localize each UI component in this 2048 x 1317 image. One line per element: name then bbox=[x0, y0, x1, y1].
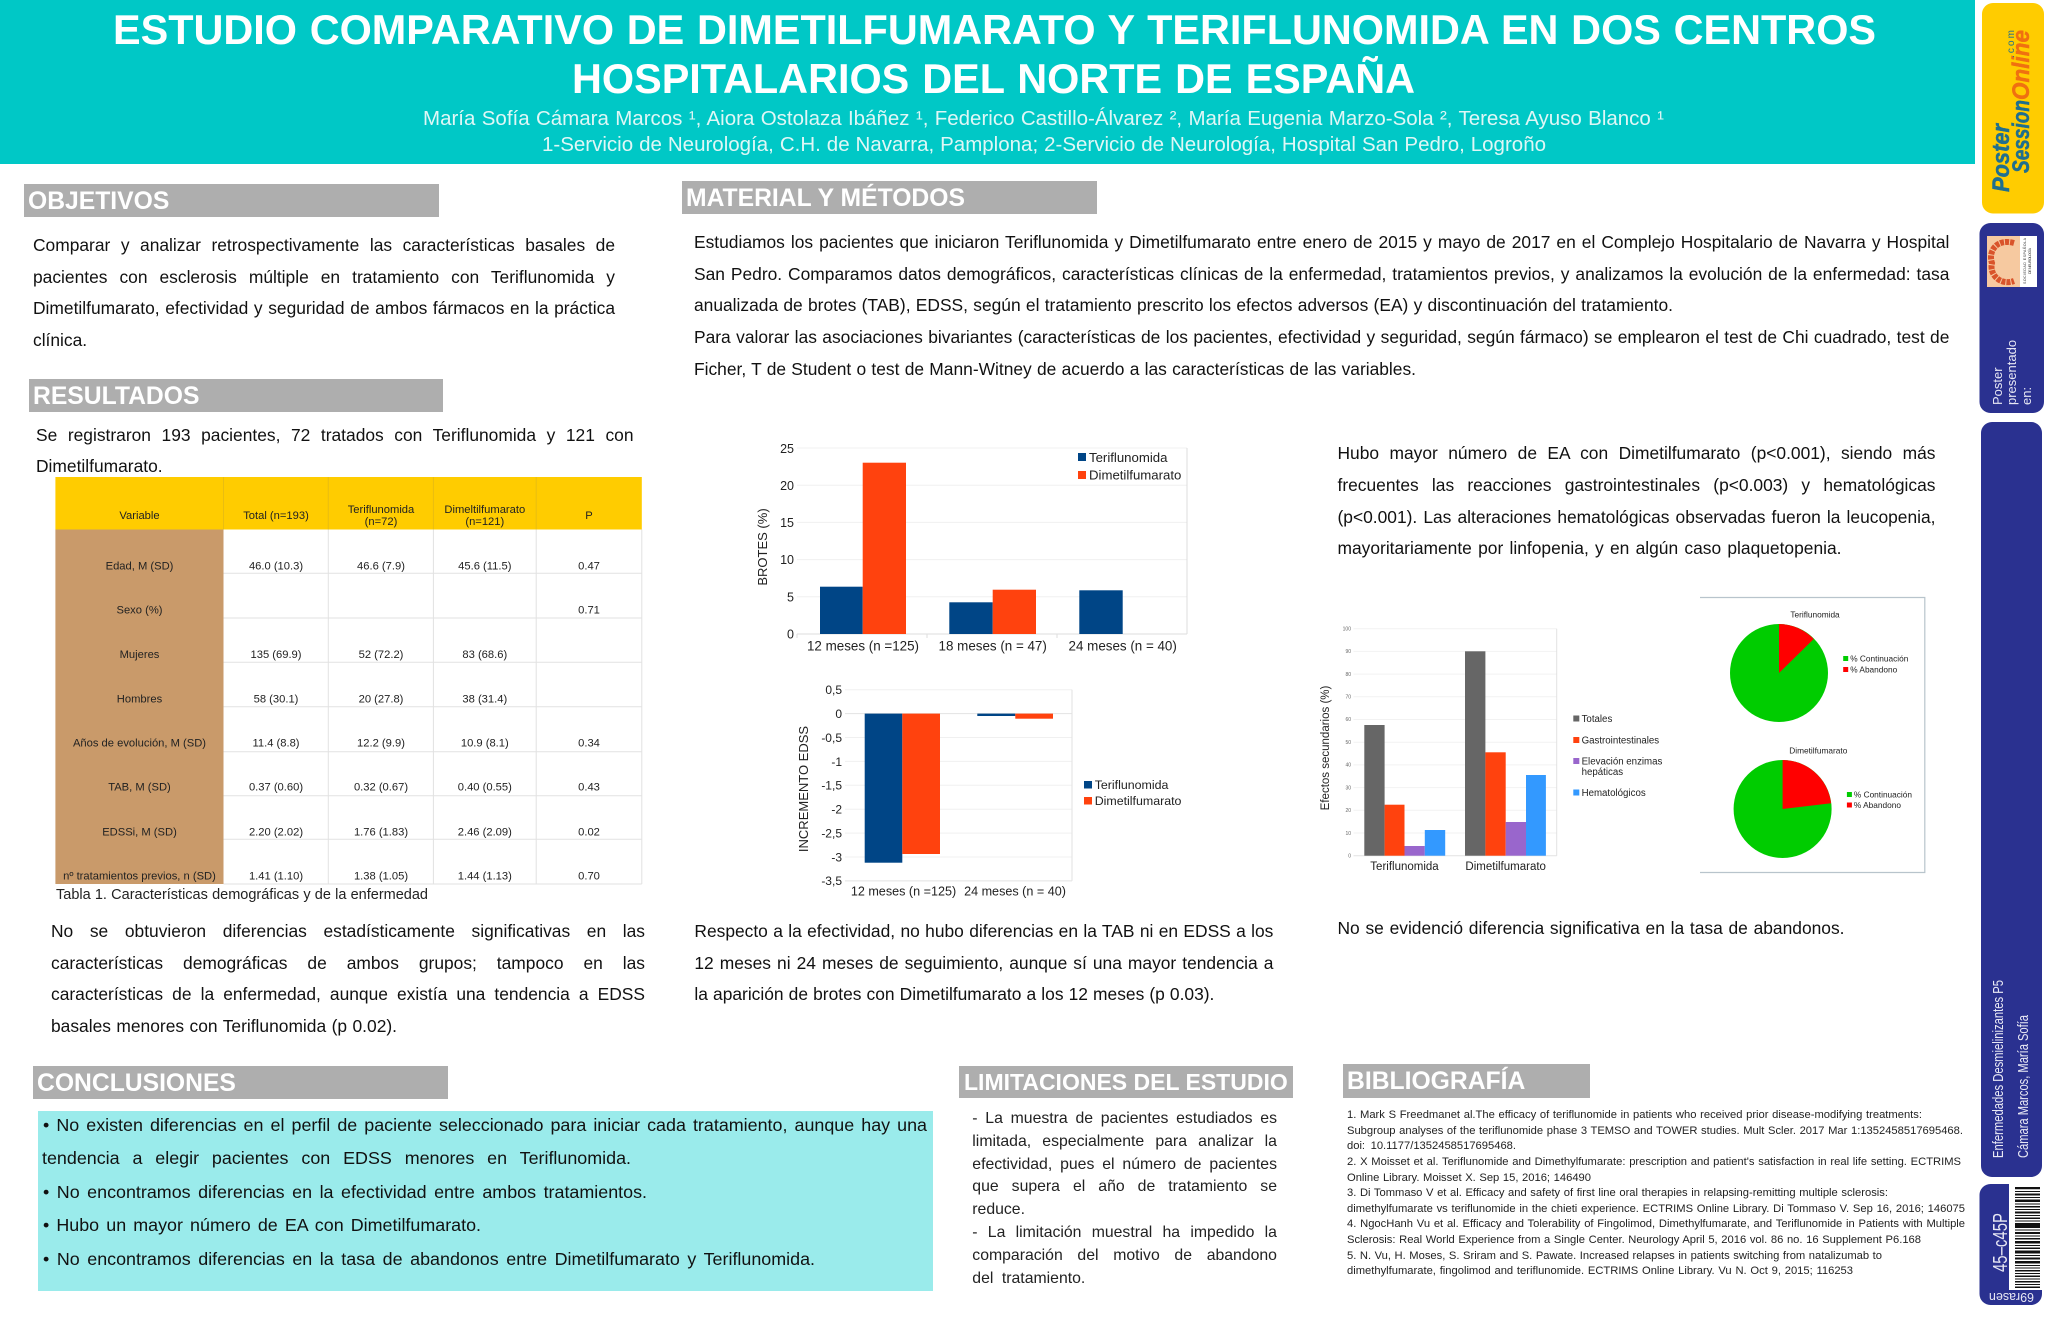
pie chart: dimetilfumarato: % Continuación bbox=[1854, 790, 1912, 800]
heading: limitaciones del estudio: LIMITACIONES DEL ESTUDIO bbox=[964, 1069, 1288, 1095]
text: objetivos: pacientes con esclerosis múltiple en tratamiento con Teriflunomida y bbox=[33, 267, 615, 287]
text: bibliografia: 3. Di Tommaso V et al. Efficacy and safety of first line oral therapies in relapsing-remitting multiple sclerosis: bbox=[1347, 1187, 1888, 1199]
bar chart: incremento EDSS: Teriflunomida bbox=[1095, 778, 1168, 792]
heading: bibliografia: BIBLIOGRAFÍA bbox=[1347, 1068, 1525, 1095]
bar chart: brotes: 12 meses (n =125) bbox=[807, 638, 919, 654]
table: baseline characteristics: TAB, M (SD) bbox=[108, 782, 171, 794]
table: baseline characteristics: 1.44 (1.13) bbox=[458, 871, 512, 883]
table: baseline characteristics: 0.34 bbox=[578, 738, 600, 750]
table: baseline characteristics: 0.70 bbox=[578, 871, 600, 883]
authors and affiliations: María Sofía Cámara Marcos ¹, Aiora Ostolaza Ibáñez ¹, Federico Castillo-Álvarez ², María Eugenia Marzo-Sola ², Teresa Ayuso Blanco ¹ bbox=[423, 106, 1664, 130]
panel: codigo y barcode: 69rasen bbox=[1989, 1290, 2034, 1305]
panel: sesion y autor bbox=[1981, 422, 2042, 1177]
table: baseline characteristics: 1.41 (1.10) bbox=[249, 871, 303, 883]
caption: tabla 1: Tabla 1. Características demográficas y de la enfermedad bbox=[56, 887, 428, 903]
logo: PosterSessionOnline: Session bbox=[2008, 100, 2035, 173]
bar chart: incremento EDSS bbox=[796, 683, 1182, 898]
table: baseline characteristics bbox=[55, 477, 642, 884]
text: limitaciones: comparación del motivo de abandono bbox=[972, 1247, 1277, 1264]
text: bibliografia bbox=[1347, 1109, 1965, 1277]
table: baseline characteristics: 0.47 bbox=[578, 560, 600, 572]
text: limitaciones bbox=[972, 1110, 1277, 1287]
bar chart: efectos secundarios: 20 bbox=[1345, 808, 1351, 814]
bar chart: brotes: Dimetilfumarato bbox=[1089, 468, 1181, 482]
table: baseline characteristics: 0.02 bbox=[578, 826, 600, 838]
bar chart: efectos secundarios bbox=[1320, 626, 1663, 873]
text: efectividad: Respecto a la efectividad, no hubo diferencias en la TAB ni en EDSS a los bbox=[694, 921, 1273, 941]
panel: poster presentado en: en: bbox=[2019, 387, 2034, 405]
table: baseline characteristics: 10.9 (8.1) bbox=[461, 738, 509, 750]
bar chart: efectos secundarios: Teriflunomida bbox=[1370, 861, 1439, 873]
table: baseline characteristics: 46.6 (7.9) bbox=[357, 560, 405, 572]
bar chart: brotes: BROTES (%) bbox=[755, 508, 770, 586]
bar chart: incremento EDSS: 0 bbox=[835, 707, 842, 721]
table: baseline characteristics: P bbox=[585, 510, 593, 522]
bar chart: efectos secundarios: 50 bbox=[1345, 740, 1351, 746]
bar chart: efectos secundarios: 70 bbox=[1345, 694, 1351, 700]
bar chart: brotes: 25 bbox=[780, 442, 794, 456]
table: baseline characteristics: 46.0 (10.3) bbox=[249, 560, 303, 572]
heading: bibliografia bbox=[1343, 1064, 1590, 1098]
text: limitaciones: limitada, especialmente para analizar la bbox=[972, 1133, 1277, 1150]
table: baseline characteristics: 58 (30.1) bbox=[254, 693, 299, 705]
table: baseline characteristics: Hombres bbox=[117, 693, 163, 705]
table: baseline characteristics: 135 (69.9) bbox=[250, 649, 302, 661]
bar chart: brotes: 10 bbox=[780, 553, 794, 567]
text: material y metodos bbox=[694, 232, 1950, 379]
bar chart: efectos secundarios: 60 bbox=[1345, 717, 1351, 723]
bar chart: incremento EDSS: 0,5 bbox=[825, 683, 842, 697]
text: bibliografia: dimethylfumarate, fingolimod and teriflunomide. ECTRIMS Online Library. Vu N. Oct 9, 2015; 116253 bbox=[1347, 1265, 1853, 1277]
bar chart: efectos secundarios: Hematológicos bbox=[1582, 788, 1646, 799]
bar chart: efectos secundarios: hepáticas bbox=[1582, 767, 1623, 778]
text: bibliografia: Subgroup analyses of the teriflunomide phase 3 TEMSO and TOWER studies. Mult Scler. 2017 Mar 1:1352458517695468. bbox=[1347, 1125, 1963, 1137]
table: baseline characteristics: 0.37 (0.60) bbox=[249, 782, 303, 794]
heading: resultados bbox=[29, 379, 443, 412]
heading: resultados: RESULTADOS bbox=[33, 383, 199, 410]
bar chart: incremento EDSS: -3 bbox=[831, 850, 842, 864]
table: baseline characteristics: 0.40 (0.55) bbox=[458, 782, 512, 794]
table: baseline characteristics: Sexo (%) bbox=[116, 605, 163, 617]
text: limitaciones: que supera el año de tratamiento se bbox=[972, 1178, 1277, 1195]
panel: poster presentado en: presentado bbox=[2004, 340, 2019, 405]
table: baseline characteristics: 52 (72.2) bbox=[359, 649, 404, 661]
table: baseline characteristics: 38 (31.4) bbox=[462, 693, 507, 705]
bar chart: brotes: 18 meses (n = 47) bbox=[939, 638, 1047, 654]
bar chart: incremento EDSS: -2 bbox=[831, 802, 842, 816]
text: material y metodos: Ficher, T de Student o test de Mann-Witney de acuerdo a las características de las variables. bbox=[694, 359, 1416, 379]
heading: material y metodos bbox=[682, 181, 1097, 214]
logo: PosterSessionOnline: Online bbox=[2008, 30, 2035, 100]
bar chart: incremento EDSS: -0,5 bbox=[821, 731, 842, 745]
text: resultados demographics: No se obtuvieron diferencias estadísticamente significativas en las bbox=[51, 921, 645, 941]
bar chart: incremento EDSS: 24 meses (n = 40) bbox=[964, 884, 1066, 898]
bar chart: efectos secundarios: Dimetilfumarato bbox=[1465, 861, 1546, 873]
text: resultados intro: Dimetilfumarato. bbox=[36, 456, 163, 476]
authors and affiliations bbox=[423, 106, 1664, 156]
table: baseline characteristics: Años de evolución, M (SD) bbox=[73, 738, 206, 750]
panel: sesion y autor: Cámara Marcos, María Sofía bbox=[2016, 1014, 2032, 1158]
bar chart: efectos secundarios: 100 bbox=[1343, 626, 1351, 632]
text: efectividad: la aparición de brotes con Dimetilfumarato a los 12 meses (p 0.03). bbox=[694, 984, 1214, 1004]
text: material y metodos: anualizada de brotes (TAB), EDSS, según el tratamiento prescrito los efectos adversos (EA) y discontinuación del tratamiento. bbox=[694, 295, 1673, 315]
text: bibliografia: 1. Mark S Freedmanet al.The efficacy of teriflunomide in patients who received prior disease-modifying treatments: bbox=[1347, 1109, 1922, 1121]
table: baseline characteristics: 1.76 (1.83) bbox=[354, 826, 408, 838]
panel: poster presentado en: Poster bbox=[1990, 367, 2005, 405]
bar chart: brotes: Teriflunomida bbox=[1089, 450, 1168, 465]
header banner bbox=[0, 0, 1975, 164]
pie chart: teriflunomida: % Continuación bbox=[1850, 654, 1909, 664]
bar chart: incremento EDSS: -2,5 bbox=[821, 826, 842, 840]
panel: codigo y barcode: 45–c45P bbox=[1990, 1213, 2012, 1272]
bar chart: brotes: 20 bbox=[780, 479, 794, 493]
text: bibliografia: 4. NgocHanh Vu et al. Efficacy and Tolerability of Fingolimod, Dimethylfumarate, and Teriflunomide in Patients with Multiple bbox=[1347, 1218, 1965, 1230]
table: baseline characteristics: (n=121) bbox=[465, 516, 505, 528]
text: material y metodos: Estudiamos los pacientes que iniciaron Teriflunomida y Dimetilfumarato entre enero de 2015 y mayo de 2017 en el Complejo Hospitalario de Navarra y Hospital bbox=[694, 232, 1949, 252]
title bbox=[113, 7, 1876, 102]
text: efectos adversos: mayoritariamente por linfopenia, y en algún caso plaquetopenia. bbox=[1338, 538, 1842, 558]
heading: objetivos: OBJETIVOS bbox=[28, 188, 169, 215]
text: objetivos bbox=[33, 235, 616, 350]
text: limitaciones: - La limitación muestral ha impedido la bbox=[972, 1224, 1277, 1241]
table: baseline characteristics: Dimeltilfumarato bbox=[444, 504, 525, 516]
bar chart: brotes: 0 bbox=[787, 628, 794, 642]
text: efectos adversos: (p<0.001). Las alteraciones hematológicas observadas fueron la leucopenia, bbox=[1338, 507, 1936, 527]
pie charts: abandonos bbox=[1700, 598, 1925, 872]
panel: conclusiones: tendencia a elegir pacientes con EDSS menores en Teriflunomida. bbox=[42, 1148, 631, 1168]
panel: conclusiones: • No encontramos diferencias en la efectividad entre ambos tratamientos. bbox=[43, 1182, 647, 1202]
text: abandonos: No se evidenció diferencia significativa en la tasa de abandonos. bbox=[1338, 918, 1844, 938]
text: objetivos: Comparar y analizar retrospectivamente las características basales de bbox=[33, 235, 615, 255]
panel: conclusiones bbox=[38, 1111, 933, 1291]
text: efectos adversos: frecuentes las reacciones gastrointestinales (p<0.003) y hematológicas bbox=[1338, 475, 1936, 495]
sidebar bbox=[1980, 3, 2044, 1305]
bar chart: incremento EDSS: INCREMENTO EDSS bbox=[796, 726, 811, 852]
bar chart: efectos secundarios: 30 bbox=[1345, 786, 1351, 792]
logo: sociedad española de neurología: DE NEUROLOGÍA bbox=[2028, 247, 2032, 274]
table: baseline characteristics: 0.32 (0.67) bbox=[354, 782, 408, 794]
text: efectividad: 12 meses ni 24 meses de seguimiento, aunque sí una mayor tendencia a bbox=[694, 953, 1273, 973]
panel: conclusiones: • Hubo un mayor número de EA con Dimetilfumarato. bbox=[43, 1215, 481, 1235]
text: limitaciones: reduce. bbox=[972, 1201, 1025, 1218]
heading: material y metodos: MATERIAL Y MÉTODOS bbox=[686, 185, 965, 212]
text: resultados demographics: características demográficas de ambos grupos; tampoco en las bbox=[51, 953, 645, 973]
panel: codigo y barcode bbox=[1980, 1184, 2043, 1305]
text: resultados intro: Se registraron 193 pacientes, 72 tratados con Teriflunomida y 121 con bbox=[36, 425, 634, 445]
bar chart: efectos secundarios: Totales bbox=[1582, 714, 1612, 725]
text: bibliografia: 5. N. Vu, H. Moses, S. Sriram and S. Pawate. Increased relapses in patients switching from natalizumab to bbox=[1347, 1250, 1882, 1262]
table: baseline characteristics: 2.20 (2.02) bbox=[249, 826, 303, 838]
table: baseline characteristics: 0.43 bbox=[578, 782, 600, 794]
barcode bbox=[2015, 1187, 2040, 1288]
text: objetivos: clínica. bbox=[33, 330, 87, 350]
bar chart: incremento EDSS: -1,5 bbox=[821, 778, 842, 792]
bar chart: incremento EDSS: 12 meses (n =125) bbox=[851, 884, 956, 898]
table: baseline characteristics: Total (n=193) bbox=[243, 510, 309, 522]
heading: objetivos bbox=[24, 184, 439, 217]
table: baseline characteristics: Variable bbox=[119, 510, 160, 522]
panel: conclusiones: • No encontramos diferencias en la tasa de abandonos entre Dimetilfumarato y Teriflunomida. bbox=[43, 1249, 815, 1269]
table: baseline characteristics: 1.38 (1.05) bbox=[354, 871, 408, 883]
bar chart: efectos secundarios: Gastrointestinales bbox=[1582, 735, 1659, 746]
text: bibliografia: Online Library. Moisset X. Sep 15, 2016; 146490 bbox=[1347, 1172, 1591, 1184]
text: material y metodos: San Pedro. Comparamos datos demográficos, características clínicas de la enfermedad, tratamientos previos, y analizamos la evolución de la enfermedad: tasa bbox=[694, 264, 1949, 284]
pie chart: teriflunomida bbox=[1730, 610, 1909, 722]
table: baseline characteristics: (n=72) bbox=[365, 516, 398, 528]
table: baseline characteristics: 12.2 (9.9) bbox=[357, 738, 405, 750]
text: resultados intro bbox=[36, 425, 634, 476]
pie chart: teriflunomida: % Abandono bbox=[1850, 664, 1898, 674]
text: efectos adversos: Hubo mayor número de EA con Dimetilfumarato (p<0.001), siendo más bbox=[1338, 443, 1936, 463]
bar chart: efectos secundarios: Elevación enzimas bbox=[1582, 756, 1663, 767]
heading: conclusiones bbox=[33, 1066, 448, 1099]
logo: PosterSessionOnline: Poster bbox=[1988, 122, 2015, 192]
table: baseline characteristics: Teriflunomida bbox=[348, 504, 415, 516]
text: objetivos: Dimetilfumarato, efectividad y seguridad de ambos fármacos en la práctica bbox=[33, 298, 615, 318]
bar chart: efectos secundarios: 0 bbox=[1348, 854, 1351, 860]
bar chart: efectos secundarios: Efectos secundarios (%) bbox=[1320, 686, 1332, 810]
pie chart: dimetilfumarato: % Abandono bbox=[1854, 800, 1901, 810]
title: HOSPITALARIOS DEL NORTE DE ESPAÑA bbox=[572, 56, 1415, 102]
table: baseline characteristics: 20 (27.8) bbox=[359, 693, 404, 705]
pie chart: dimetilfumarato: Dimetilfumarato bbox=[1789, 746, 1848, 756]
bar chart: efectos secundarios: 90 bbox=[1345, 649, 1351, 655]
text: limitaciones: del tratamiento. bbox=[972, 1270, 1085, 1287]
bar chart: efectos secundarios: 80 bbox=[1345, 672, 1351, 678]
bar chart: brotes: 15 bbox=[780, 516, 794, 530]
pie chart: teriflunomida: Teriflunomida bbox=[1790, 610, 1840, 620]
bar chart: brotes: 24 meses (n = 40) bbox=[1069, 638, 1177, 654]
text: limitaciones: - La muestra de pacientes estudiados es bbox=[972, 1110, 1277, 1127]
table: baseline characteristics: 11.4 (8.8) bbox=[252, 738, 300, 750]
panel: sesion y autor: Enfermedades Desmielinizantes P5 bbox=[1991, 980, 2007, 1158]
logo: sociedad española de neurología: SOCIEDAD ESPAÑOLA bbox=[2022, 237, 2027, 284]
table: baseline characteristics: 0.71 bbox=[578, 605, 600, 617]
text: bibliografia: 2. X Moisset et al. Teriflunomide and Dimethylfumarate: prescription and patient's satisfaction in real life setting. ECTRIMS bbox=[1347, 1156, 1961, 1168]
bar chart: incremento EDSS: Dimetilfumarato bbox=[1095, 794, 1182, 808]
text: efectos adversos bbox=[1338, 443, 1936, 558]
logo: sociedad española de neurología bbox=[1987, 236, 2037, 287]
text: resultados demographics: características de la enfermedad, aunque existía una tendencia a EDSS bbox=[51, 984, 645, 1004]
text: material y metodos: Para valorar las asociaciones bivariantes (características de los pacientes, efectividad y seguridad, según fármaco) se emplearon el test de Chi cuadrado, test de bbox=[694, 327, 1949, 347]
logo: PosterSessionOnline: .com bbox=[2006, 30, 2017, 58]
bar chart: efectos secundarios: 40 bbox=[1345, 762, 1351, 768]
bar chart: brotes bbox=[755, 442, 1187, 654]
text: limitaciones: efectividad, pues el número de pacientes bbox=[972, 1156, 1277, 1173]
title: ESTUDIO COMPARATIVO DE DIMETILFUMARATO Y TERIFLUNOMIDA EN DOS CENTROS bbox=[113, 7, 1876, 53]
bar chart: incremento EDSS: -1 bbox=[831, 755, 842, 769]
table: baseline characteristics: nº tratamientos previos, n (SD) bbox=[63, 871, 216, 883]
text: bibliografia: doi: 10.1177/1352458517695468. bbox=[1347, 1140, 1516, 1152]
table: baseline characteristics: 2.46 (2.09) bbox=[458, 826, 512, 838]
heading: conclusiones: CONCLUSIONES bbox=[37, 1070, 236, 1097]
text: bibliografia: Sclerosis: Real World Experience from a Single Center. Neurology April 5, 2016 vol. 86 no. 16 Supplement P6.168 bbox=[1347, 1234, 1921, 1246]
logo: PosterSessionOnline bbox=[1982, 3, 2044, 214]
bar chart: efectos secundarios: 10 bbox=[1345, 831, 1351, 837]
bar chart: incremento EDSS: -3,5 bbox=[821, 874, 842, 888]
text: resultados demographics: basales menores con Teriflunomida (p 0.02). bbox=[51, 1016, 397, 1036]
bar chart: brotes: 5 bbox=[787, 590, 794, 604]
table: baseline characteristics: EDSSi, M (SD) bbox=[102, 826, 177, 838]
table: baseline characteristics: Edad, M (SD) bbox=[106, 560, 174, 572]
table: baseline characteristics: 83 (68.6) bbox=[462, 649, 507, 661]
panel: poster presentado en bbox=[1980, 223, 2044, 413]
text: efectividad bbox=[694, 921, 1274, 1004]
text: resultados demographics bbox=[51, 921, 645, 1036]
table: baseline characteristics: 45.6 (11.5) bbox=[458, 560, 512, 572]
panel: conclusiones: • No existen diferencias en el perfil de paciente seleccionado para iniciar cada tratamiento, aunque hay una bbox=[43, 1115, 927, 1135]
table: baseline characteristics: Mujeres bbox=[120, 649, 160, 661]
pie chart: dimetilfumarato bbox=[1734, 746, 1912, 858]
authors and affiliations: 1-Servicio de Neurología, C.H. de Navarra, Pamplona; 2-Servicio de Neurología, Hospital San Pedro, Logroño bbox=[542, 132, 1546, 156]
text: bibliografia: dimethylfumarate vs teriflunomide in the chieti experience. ECTRIMS Online Library. Di Tommaso V. Sep 16, 2016; 146075 bbox=[1347, 1203, 1965, 1215]
